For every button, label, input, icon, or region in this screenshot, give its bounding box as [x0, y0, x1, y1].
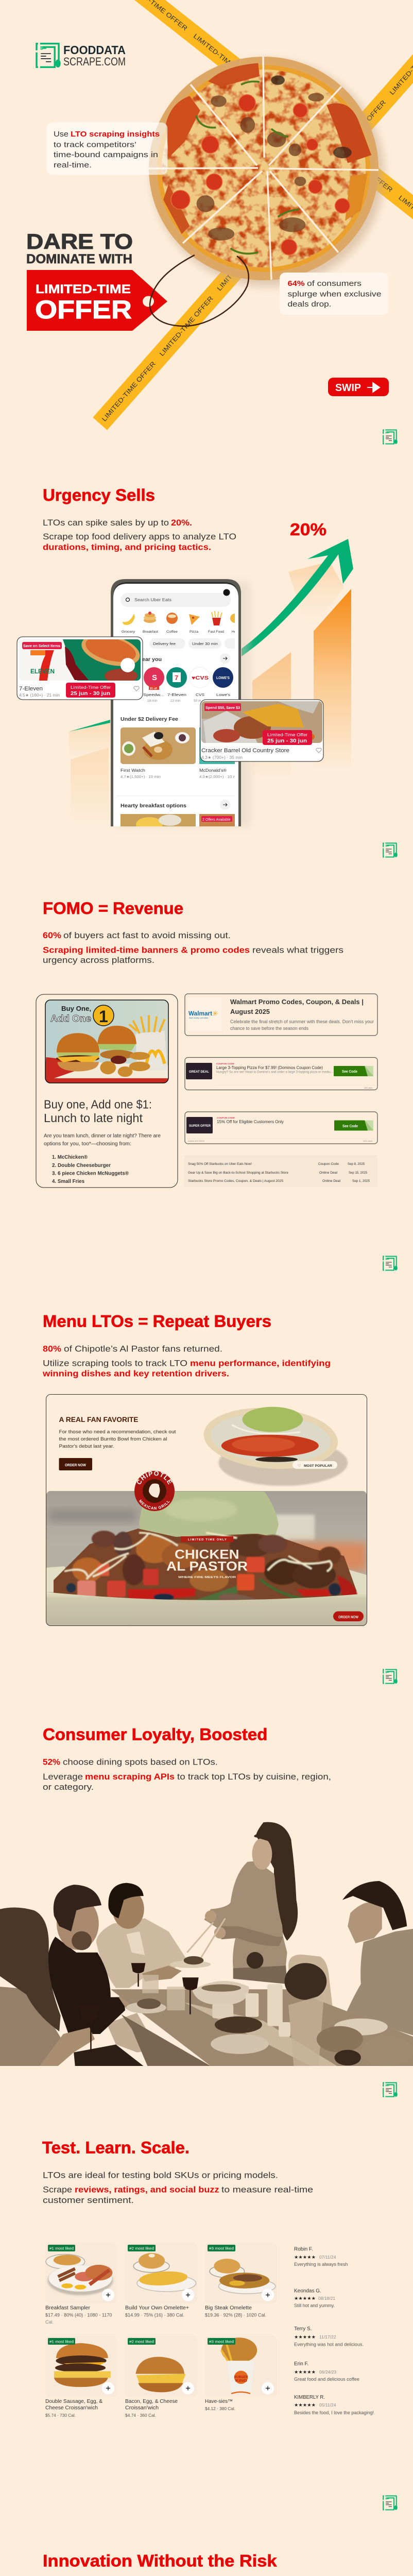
stores near you: S — [152, 673, 157, 682]
search bar — [121, 589, 231, 607]
menu item captions — [45, 2305, 266, 2418]
label: Burger King logo — [234, 2376, 248, 2383]
card: Dominos coupon: COUPON CODE — [216, 1062, 234, 1065]
card: McDonald's offer — [36, 994, 178, 1188]
customer reviews — [294, 2246, 374, 2416]
text block: Scraping limited-time banners & promo codes — [43, 945, 250, 955]
stat: 20 percent: 20% — [290, 520, 326, 539]
customer reviews: ★★★★★ — [294, 2402, 316, 2408]
add buttons — [102, 2289, 274, 2395]
card: 15 percent coupon: SUPER OFFER — [189, 1125, 211, 1128]
panel: FOMO revenue — [36, 899, 377, 1188]
card: 15 percent coupon — [185, 1112, 377, 1144]
under 2 dollar delivery fee row: 4.7★(1,500+) · 10 min — [121, 775, 161, 779]
callout: LTO scraping insights: to track competitors’ — [54, 140, 136, 149]
offer description: 1. McChicken® — [52, 1154, 88, 1160]
card: 7-Eleven: Save on Select Items — [23, 643, 60, 648]
headline: DOMINATE WITH — [26, 252, 132, 266]
card: 15 percent coupon: 15% Off for Eligible Customers Only — [217, 1120, 284, 1124]
under 2 dollar delivery fee row: 4.0★(2,000+) · 10 n — [199, 775, 235, 779]
label: Burger King logo: KING — [235, 2379, 248, 2383]
card: 7-Eleven: 4.5★ (160+) · 21 min — [19, 693, 60, 698]
table: promo listing: Gear Up & Save Big on Back-to-School Shopping at Starbucks Store — [188, 1171, 288, 1175]
text block: reviews, ratings, and social buzz — [75, 2184, 219, 2195]
headline — [26, 229, 133, 266]
most liked badges: #3 most liked — [209, 2339, 234, 2344]
limited time banner: CHICKEN — [175, 1548, 239, 1562]
yellow tape stripes: LIMITED-TIME OFFER — [100, 360, 157, 423]
customer reviews: ★★★★★ — [294, 2334, 316, 2340]
callout: 64 percent: deals drop. — [287, 300, 332, 309]
under 2 dollar delivery fee row — [121, 716, 235, 779]
heading: Menu LTOs = Repeat Buyers — [43, 1312, 271, 1330]
filter pills: Delivery fee — [153, 641, 176, 646]
card: Cracker Barrel: Cracker Barrel Old Country Store — [201, 748, 289, 754]
table: promo listing: Sep 1, 2025 — [352, 1179, 370, 1183]
menu item captions: Breakfast Sampler — [45, 2305, 91, 2311]
table: promo listing — [184, 1155, 377, 1187]
most popular tag — [292, 1461, 337, 1469]
category icons: Coffee — [166, 630, 178, 634]
card: Walmart promo: ✳ — [212, 1009, 218, 1018]
card: Dominos coupon — [185, 1057, 377, 1090]
swipe button — [328, 378, 389, 396]
most liked badges: #1 most liked — [49, 2339, 74, 2344]
text block — [42, 1344, 331, 1379]
menu item captions: $14.99 · 75% (16) · 380 Cal. — [125, 2312, 184, 2317]
logo: Chipotle: MEXICAN GRILL — [139, 1499, 170, 1510]
category icons: Fast Food — [208, 630, 224, 634]
price tag: limited-time offer — [27, 270, 167, 331]
search bar: Search Uber Eats — [134, 598, 171, 602]
most liked badges: #2 most liked — [129, 2339, 154, 2344]
most liked badges: #3 most liked — [209, 2246, 234, 2250]
card: 15 percent coupon: COUPON CODE — [217, 1116, 235, 1119]
card: Dominos coupon: Large 3-Topping Pizza For $7.99! (Dominos Coupon Code) — [216, 1065, 323, 1070]
offer description: 2. Double Cheeseburger — [52, 1162, 111, 1168]
food photo: Add One — [50, 1013, 91, 1024]
callout: 64 percent: splurge when exclusive — [287, 290, 381, 299]
customer reviews: 07/11/24 — [319, 2255, 336, 2260]
phone mockup — [111, 579, 250, 832]
customer reviews: 11/17/22 — [319, 2334, 336, 2340]
menu item captions: $4.12 · 380 Cal. — [205, 2406, 235, 2411]
text block — [43, 1757, 331, 1792]
logo: SCRAPE.COM — [63, 55, 126, 68]
card: Dominos coupon: GREAT DEAL — [189, 1071, 209, 1074]
customer reviews: Great food and delicious coffee — [294, 2377, 359, 2382]
hearty breakfast row — [121, 800, 235, 826]
order button: ORDER NOW — [65, 1463, 87, 1467]
text block: 52% — [43, 1757, 60, 1767]
customer reviews: Keondas G. — [294, 2289, 321, 2294]
table: promo listing: Online Deal — [319, 1171, 338, 1175]
price tag: limited-time offer: OFFER — [35, 295, 132, 324]
stores near you: $5 off — [150, 687, 157, 690]
panel: consumer loyalty — [0, 1725, 413, 2066]
order pill — [333, 1612, 364, 1621]
heading: Urgency Sells — [43, 486, 155, 504]
customer reviews: Terry S. — [294, 2326, 312, 2332]
offer description: options for you, too*—choosing from: — [44, 1141, 131, 1147]
most liked badges: #2 most liked — [129, 2246, 154, 2250]
text block: of buyers act fast to avoid missing out. — [63, 930, 231, 940]
customer reviews: Robin F. — [294, 2246, 313, 2252]
price tag: limited-time offer: LIMITED-TIME — [36, 282, 131, 296]
text block: reveals what triggers — [252, 945, 343, 955]
callout: LTO scraping insights — [46, 123, 167, 175]
table: promo listing: Snag 50% Off Starbucks on Uber Eats Now! — [188, 1162, 252, 1166]
limited time banner: LIMITED TIME ONLY — [188, 1538, 227, 1541]
card: Walmart promo: Walmart Promo Codes, Coupon, & Deals | — [230, 998, 364, 1006]
customer reviews: KIMBERLY R. — [294, 2395, 325, 2400]
card: Cracker Barrel: Spend $50, Save $3 — [205, 705, 240, 710]
offer title second line: Lunch to late night — [44, 1111, 143, 1125]
table: promo listing: Online Deal — [322, 1179, 341, 1183]
logo: FOODDATA — [63, 43, 126, 57]
limited-time badge — [66, 683, 115, 698]
text block: choose dining spots based on LTOs. — [63, 1757, 218, 1767]
description: For those who need a recommendation, check out — [59, 1429, 176, 1435]
text block: Scrape — [43, 2184, 72, 2195]
category icons: Grocery — [122, 630, 135, 634]
most liked badges — [48, 2245, 235, 2345]
menu item captions: Croissan'wich — [125, 2405, 159, 2411]
description: Pastor's debut last year. — [59, 1444, 114, 1449]
burrito bowl — [202, 1403, 348, 1486]
heading: Test. Learn. Scale. — [42, 2139, 190, 2157]
menu item captions: $5.74 · 730 Cal. — [45, 2413, 76, 2418]
logo: Chipotle: CHIPOTLE — [137, 1471, 173, 1485]
card: Walmart promo: August 2025 — [230, 1008, 270, 1015]
hero food photo — [46, 1491, 367, 1626]
limited-time badge: Limited-Time Offer — [267, 733, 307, 737]
hearty breakfast row: Hearty breakfast options — [121, 803, 186, 809]
most liked badges: #1 most liked — [49, 2246, 74, 2250]
callout: 64 percent — [280, 273, 388, 315]
pizza — [149, 57, 384, 286]
stores near you: ear you — [142, 656, 162, 663]
text block — [43, 930, 343, 965]
panel: test learn scale — [42, 2139, 374, 2418]
heading: Innovation Without the Risk — [43, 2551, 277, 2570]
order pill: ORDER NOW — [338, 1615, 359, 1619]
offer description: Are you team lunch, dinner or late night? There are — [44, 1132, 161, 1139]
card: 7-Eleven — [16, 637, 143, 700]
text block: 20%. — [171, 518, 192, 528]
stores near you: Speedw... — [143, 692, 164, 697]
yellow tape stripes: LIMITED-TIME OFFER — [331, 99, 387, 162]
hearty breakfast row: 2 Offers Available — [202, 818, 231, 822]
swipe button: SWIP — [335, 382, 361, 394]
stores near you: 50 m — [194, 699, 201, 703]
callout: 64 percent: 64% — [287, 279, 305, 288]
tag string — [150, 255, 249, 326]
menu item captions: Bacon, Egg, & Cheese — [125, 2399, 178, 2404]
card: 15 percent coupon: 1111 used — [363, 1140, 372, 1142]
panel: hero — [26, 0, 413, 430]
panel: menu LTOs — [42, 1312, 367, 1626]
card: Dominos coupon: Hungry? So are we! Head to Domino's and order a large 3-topping pizza or mediu... — [216, 1071, 333, 1074]
limited-time badge: Limited-Time Offer — [71, 685, 111, 690]
filter pills — [149, 638, 240, 649]
limited time banner: AL PASTOR — [166, 1559, 248, 1573]
text block: LTOs can spike sales by up to — [43, 518, 169, 528]
menu item captions: Double Sausage, Egg, & — [45, 2399, 102, 2404]
headline: DARE TO — [26, 229, 133, 253]
text block: or category. — [43, 1782, 94, 1792]
menu tiles — [45, 2243, 277, 2418]
brand marks — [383, 430, 398, 2510]
yellow tape stripes: LIMITED-TIME OFFER — [329, 140, 394, 194]
customer reviews: 05/11/24 — [319, 2402, 336, 2408]
text block — [43, 518, 236, 552]
customer reviews: ★★★★★ — [294, 2369, 316, 2375]
table: promo listing: Sep 8, 2025 — [348, 1162, 365, 1166]
text block: LTOs are ideal for testing bold SKUs or pricing models. — [43, 2170, 278, 2180]
text block: to measure real-time — [221, 2184, 313, 2195]
text block: of Chipotle’s Al Pastor fans returned. — [64, 1344, 222, 1354]
offer description: 3. 6 piece Chicken McNuggets® — [52, 1171, 129, 1177]
card: 7-Eleven: ELEVEN — [30, 668, 55, 675]
yellow tape stripes: LIMITED-TIME OFFER — [192, 32, 257, 86]
callout: 64 percent: of consumers — [307, 279, 362, 288]
card: Walmart promo — [185, 994, 377, 1036]
label: Burger King logo: BURGER — [234, 2376, 248, 2379]
card: Cracker Barrel: 4.3★ (700+) · 35 min — [201, 755, 243, 760]
text block: urgency across platforms. — [43, 955, 154, 965]
customer reviews: 06/24/23 — [319, 2369, 336, 2375]
description: the most ordered Burrito Bowl from Chicken al — [59, 1436, 167, 1442]
card: Chipotle site — [46, 1394, 367, 1626]
card: Dominos coupon: See Code — [342, 1070, 357, 1074]
yellow tape stripes — [93, 0, 413, 430]
card: Walmart promo: Save money. Live better. — [189, 1017, 209, 1019]
growth chart bars — [69, 562, 351, 826]
card: Walmart promo: Walmart — [188, 1010, 212, 1017]
food photo: 1 — [99, 1007, 108, 1026]
text block: menu scraping APIs — [85, 1772, 175, 1782]
menu item captions: Build Your Own Omelette+ — [125, 2305, 189, 2311]
customer reviews: ★★★★★ — [294, 2296, 316, 2301]
card: Dominos coupon: 285 used — [364, 1087, 372, 1089]
yellow tape stripes: LIMITED-TIME OFFER — [216, 229, 272, 292]
card: Walmart promo: Celebrate the final stretch of summer with these deals. Don't miss your — [230, 1019, 374, 1024]
most popular tag: MOST POPULAR — [304, 1464, 332, 1468]
stores near you: Lowe's — [216, 692, 230, 697]
limited time banner: WHERE FIRE MEETS FLAVOR — [178, 1576, 236, 1579]
table: promo listing: Starbucks Store Promo Codes, Coupon, & Deals | August 2025 — [188, 1179, 283, 1183]
customer reviews: 08/18/21 — [318, 2296, 335, 2301]
card: 15 percent coupon: expires 8/17/2025 — [188, 1140, 205, 1142]
heading: FOMO = Revenue — [43, 899, 183, 918]
filter pills: Under 30 min — [192, 641, 218, 646]
limited-time badge: 25 jun - 30 jun — [267, 738, 307, 744]
menu item captions: Cal. — [45, 2319, 54, 2325]
limited-time badge: 25 jun - 30 jun — [71, 691, 110, 697]
category icons — [122, 611, 239, 634]
menu item captions: Cheese Croissan'wich — [45, 2405, 98, 2411]
panel: urgency sells — [0, 486, 413, 2418]
menu item captions: $17.49 · 80% (40) · 1080 - 1170 — [45, 2312, 112, 2317]
stores near you: 7-Eleven — [167, 692, 186, 697]
text block: durations, timing, and pricing tactics. — [43, 542, 211, 552]
card: Walmart promo: chance to save before the season ends — [230, 1026, 308, 1031]
callout: LTO scraping insights: Use — [54, 130, 68, 139]
callout: LTO scraping insights: real-time. — [54, 161, 92, 170]
text block: Scrape top food delivery apps to analyze LTO — [43, 532, 236, 541]
category icons: Pizza — [190, 630, 198, 634]
stores near you — [142, 653, 233, 703]
menu item captions: $19.36 · 92% (28) · 1020 Cal. — [205, 2312, 266, 2317]
customer reviews: Everything is always fresh — [294, 2262, 348, 2267]
yellow tape stripes: LIMITED-TIME OFFER — [158, 295, 215, 358]
text block: menu performance, identifying — [190, 1358, 331, 1368]
callout: LTO scraping insights: LTO scraping insights — [71, 130, 160, 139]
customer reviews: Erin F. — [294, 2361, 308, 2367]
menu item captions: Big Steak Omelette — [205, 2305, 252, 2311]
arrow: growth — [69, 539, 353, 732]
stores near you: 18 min — [147, 699, 158, 703]
order button — [59, 1458, 92, 1470]
customer reviews: ★★★★★ — [294, 2255, 316, 2260]
category icons: He — [232, 630, 236, 634]
category icons: Breakfast — [143, 630, 158, 634]
text block: Utilize scraping tools to track LTO — [43, 1358, 187, 1368]
menu item captions: $4.74 · 360 Cal. — [125, 2413, 156, 2418]
text block: to track top LTOs by cuisine, region, — [177, 1772, 331, 1782]
card: Cracker Barrel — [200, 700, 323, 761]
limited time banner — [166, 1536, 248, 1579]
photo: friends at dining table — [0, 1822, 413, 2066]
limited-time badge — [263, 730, 312, 745]
customer reviews: Besides the food, I love the packaging! — [294, 2410, 374, 2416]
under 2 dollar delivery fee row: McDonald's® — [199, 768, 227, 773]
customer reviews: Everything was hot and delicious. — [294, 2342, 364, 2347]
stores near you: ♥CVS — [192, 675, 209, 681]
food photo — [43, 1000, 168, 1083]
stores near you: 7 — [175, 674, 178, 682]
food illustrations — [46, 2253, 276, 2394]
stores near you: CVS — [196, 692, 204, 697]
text block: customer sentiment. — [43, 2195, 134, 2205]
logo: Chipotle — [134, 1471, 175, 1511]
customer reviews: Still hot and yummy. — [294, 2303, 335, 2309]
under 2 dollar delivery fee row: Under $2 Delivery Fee — [121, 716, 178, 722]
table: promo listing: Coupon Code — [318, 1162, 339, 1166]
callout: LTO scraping insights: time-bound campaigns in — [54, 150, 158, 159]
description — [59, 1429, 176, 1449]
offer title: Buy one, Add one $1: — [44, 1097, 152, 1111]
section title: A REAL FAN FAVORITE — [59, 1416, 138, 1423]
table: promo listing: Sep 15, 2025 — [349, 1171, 367, 1175]
heading: Consumer Loyalty, Boosted — [43, 1725, 268, 1743]
offer description: 4. Small Fries — [52, 1178, 84, 1184]
logo — [37, 43, 126, 68]
text block: 60% — [43, 930, 61, 940]
card: 7-Eleven: 7-Eleven — [19, 686, 43, 692]
stores near you: LOWE'S — [216, 676, 230, 680]
card: 15 percent coupon: See Code — [342, 1125, 358, 1128]
most popular tag: ♡ — [298, 1464, 301, 1468]
food photo: Buy One, — [61, 1005, 91, 1012]
under 2 dollar delivery fee row: First Watch — [121, 768, 145, 773]
menu item captions: Have-sies™ — [205, 2399, 233, 2404]
text block: 80% — [43, 1344, 61, 1354]
stores near you: 22 min — [170, 699, 181, 703]
text block — [43, 2170, 313, 2205]
text block: winning dishes and key retention drivers. — [42, 1368, 229, 1379]
text block: Leverage — [43, 1772, 83, 1782]
offer description — [44, 1132, 161, 1184]
